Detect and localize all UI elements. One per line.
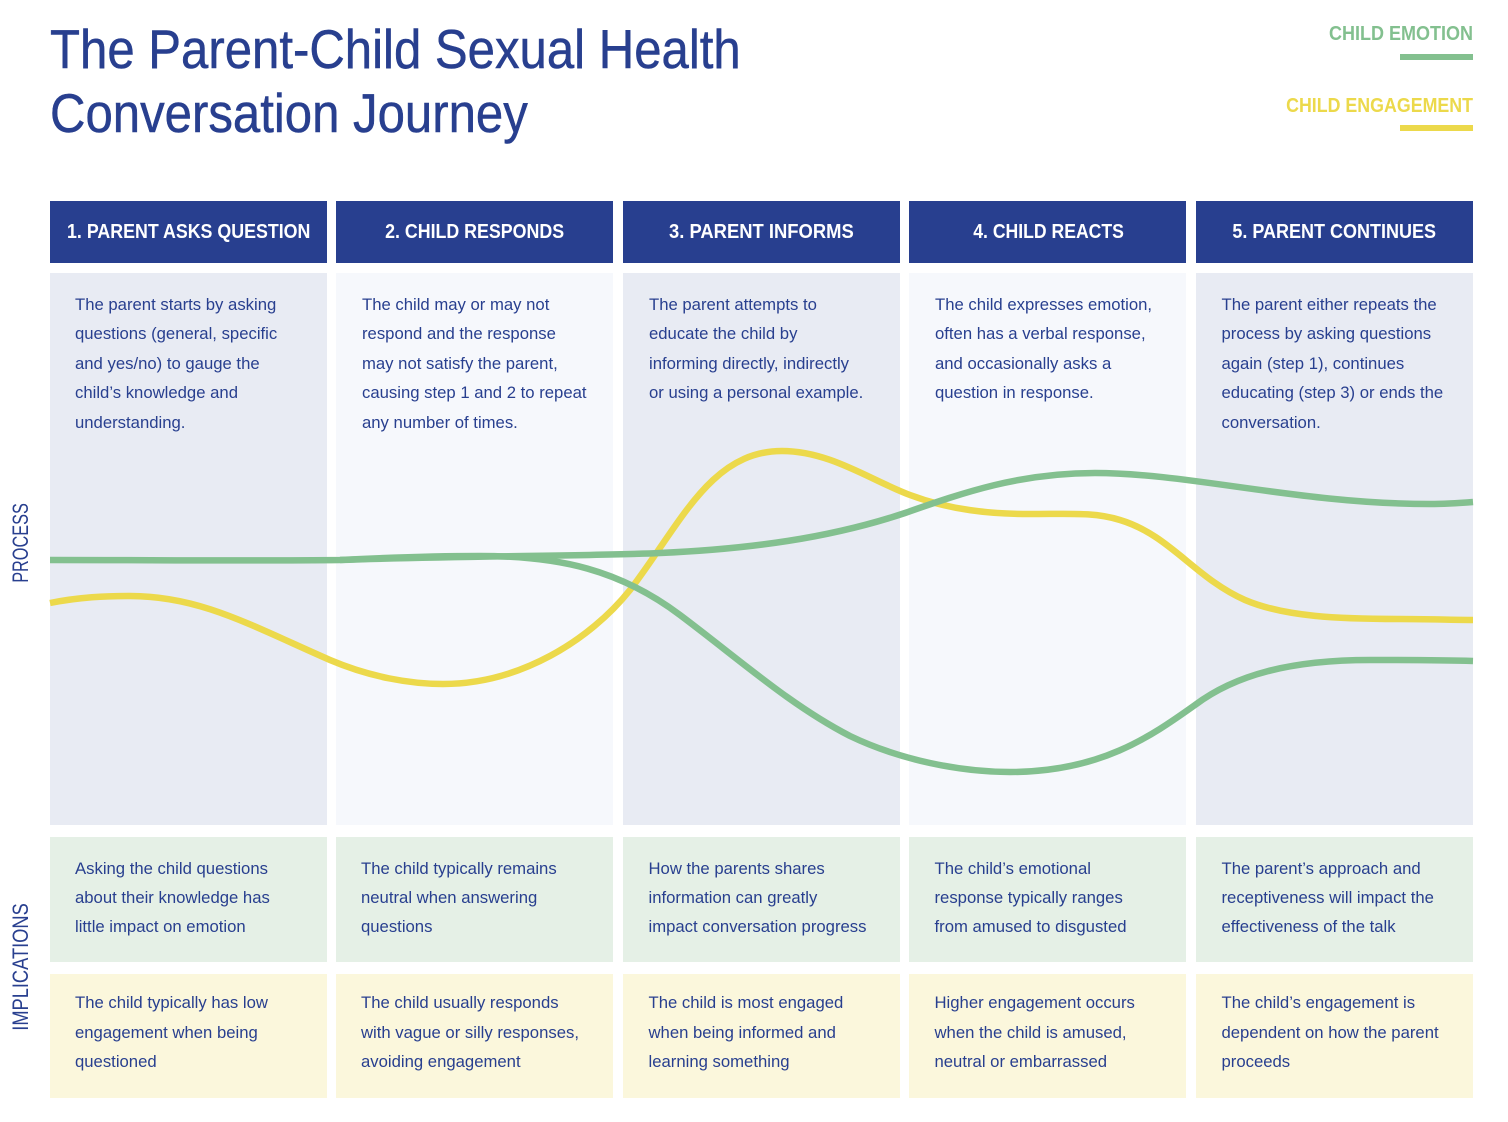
panel: process step 1: understanding. xyxy=(75,413,185,432)
panel: engagement implication 5 xyxy=(1196,974,1473,1098)
panel: process step 5 xyxy=(1196,273,1473,825)
panel: process step 5: conversation. xyxy=(1222,413,1321,432)
panel: process step 4: question in response. xyxy=(935,383,1094,402)
heading: step 1 xyxy=(50,201,327,263)
legend: child engagement xyxy=(1286,95,1473,131)
panel: engagement implication 2: with vague or silly responses, xyxy=(361,1022,579,1042)
panel: emotion implication 2: The child typically remains xyxy=(361,858,557,878)
panel: process step 3: educate the child by xyxy=(649,324,797,343)
panel: process step 5: educating (step 3) or ends the xyxy=(1222,383,1443,402)
panel: engagement implication 1: questioned xyxy=(75,1052,157,1071)
title xyxy=(50,18,741,144)
panel: process step 3: or using a personal example. xyxy=(649,383,863,402)
label: process: PROCESS xyxy=(8,503,33,583)
panel: engagement implication 5: proceeds xyxy=(1222,1052,1290,1071)
panel: engagement implication 3: The child is most engaged xyxy=(648,993,843,1012)
panel: emotion implication 2 xyxy=(336,837,613,962)
panel: process step 1: and yes/no) to gauge the xyxy=(75,354,260,373)
panel: process step 2: causing step 1 and 2 to repeat xyxy=(362,383,587,402)
panel: engagement implication 4 xyxy=(909,974,1186,1098)
curve: child emotion, upper path xyxy=(50,473,1473,560)
panel: emotion implication 5: receptiveness will impact the xyxy=(1222,888,1434,906)
panel: engagement implication 2: The child usually responds xyxy=(361,993,559,1012)
panel: process step 4: often has a verbal response, xyxy=(935,324,1146,343)
panel: emotion implication 1 xyxy=(50,837,327,962)
panel: process step 1: The parent starts by asking xyxy=(75,295,276,314)
panel: engagement implication 3 xyxy=(623,974,900,1098)
panel: emotion implication 2: neutral when answering xyxy=(361,888,537,906)
heading: step 2 xyxy=(336,201,613,263)
panel: engagement implication 4: neutral or embarrassed xyxy=(934,1052,1107,1071)
heading: step 5: 5. PARENT CONTINUES xyxy=(1233,221,1436,243)
panel: emotion implication 2: questions xyxy=(361,916,432,936)
panel: process step 1: child’s knowledge and xyxy=(75,383,238,402)
heading: step 5 xyxy=(1196,201,1473,263)
panel: emotion implication 3: impact conversation progress xyxy=(648,916,866,936)
title: The Parent-Child Sexual Health xyxy=(50,18,741,80)
panel: engagement implication 3: when being informed and xyxy=(648,1022,836,1042)
panel: emotion implication 3: information can greatly xyxy=(648,888,817,906)
panel: emotion implication 3: How the parents shares xyxy=(648,858,825,878)
panel: engagement implication 4: when the child is amused, xyxy=(934,1022,1127,1042)
label: implications: IMPLICATIONS xyxy=(8,903,32,1031)
panel: process step 1: questions (general, specific xyxy=(75,324,277,343)
panel: emotion implication 5 xyxy=(1196,837,1473,962)
panel: process step 2 xyxy=(336,273,613,825)
curve: child engagement xyxy=(50,451,1473,684)
panel: emotion implication 4: from amused to disgusted xyxy=(934,916,1127,936)
title: Conversation Journey xyxy=(50,82,528,144)
panel: process step 2: respond and the response xyxy=(362,324,556,343)
panel: process step 4: The child expresses emotion, xyxy=(935,295,1152,314)
panel: process step 5: again (step 1), continues xyxy=(1222,354,1404,373)
curve: child emotion, lower path xyxy=(340,556,1473,772)
panel: process step 2: may not satisfy the parent, xyxy=(362,354,558,373)
legend: child emotion: CHILD EMOTION xyxy=(1329,23,1473,45)
panel: process step 4 xyxy=(909,273,1186,825)
panel: engagement implication 2 xyxy=(336,974,613,1098)
legend: child engagement: CHILD ENGAGEMENT xyxy=(1286,95,1473,117)
panel: emotion implication 4: The child’s emotional xyxy=(934,858,1091,878)
panel: process step 2: The child may or may not xyxy=(362,295,549,314)
panel: emotion implication 1: Asking the child questions xyxy=(75,858,268,878)
heading: step 2: 2. CHILD RESPONDS xyxy=(385,221,564,243)
legend: child emotion xyxy=(1329,23,1473,60)
panel: process step 4: and occasionally asks a xyxy=(935,354,1111,373)
panel: emotion implication 4 xyxy=(909,837,1186,962)
panel: engagement implication 3: learning something xyxy=(648,1052,790,1071)
heading: step 3 xyxy=(623,201,900,263)
panel: process step 1 xyxy=(50,273,327,825)
panel: process step 3: The parent attempts to xyxy=(649,295,817,314)
panel: engagement implication 4: Higher engagement occurs xyxy=(934,993,1135,1012)
panel: process step 5: process by asking questions xyxy=(1222,324,1431,343)
panel: engagement implication 5: The child’s engagement is xyxy=(1222,993,1415,1012)
heading: step 4: 4. CHILD REACTS xyxy=(973,221,1124,243)
heading: step 3: 3. PARENT INFORMS xyxy=(669,221,854,243)
panel: engagement implication 2: avoiding engagement xyxy=(361,1052,521,1071)
panel: process step 2: any number of times. xyxy=(362,413,518,432)
panel: engagement implication 1: engagement when being xyxy=(75,1022,258,1042)
panel: emotion implication 5: The parent’s approach and xyxy=(1222,858,1421,878)
panel: engagement implication 1: The child typically has low xyxy=(75,993,268,1012)
panel: emotion implication 4: response typically ranges xyxy=(934,888,1123,906)
panel: engagement implication 5: dependent on how the parent xyxy=(1222,1022,1439,1042)
panel: process step 5: The parent either repeats the xyxy=(1222,295,1437,314)
panel: engagement implication 1 xyxy=(50,974,327,1098)
panel: emotion implication 5: effectiveness of the talk xyxy=(1222,916,1396,936)
panel: emotion implication 3 xyxy=(623,837,900,962)
panel: emotion implication 1: about their knowledge has xyxy=(75,888,270,906)
heading: step 4 xyxy=(909,201,1186,263)
panel: process step 3 xyxy=(623,273,900,825)
panel: emotion implication 1: little impact on emotion xyxy=(75,916,246,936)
panel: process step 3: informing directly, indirectly xyxy=(649,354,849,373)
heading: step 1: 1. PARENT ASKS QUESTION xyxy=(67,221,310,243)
